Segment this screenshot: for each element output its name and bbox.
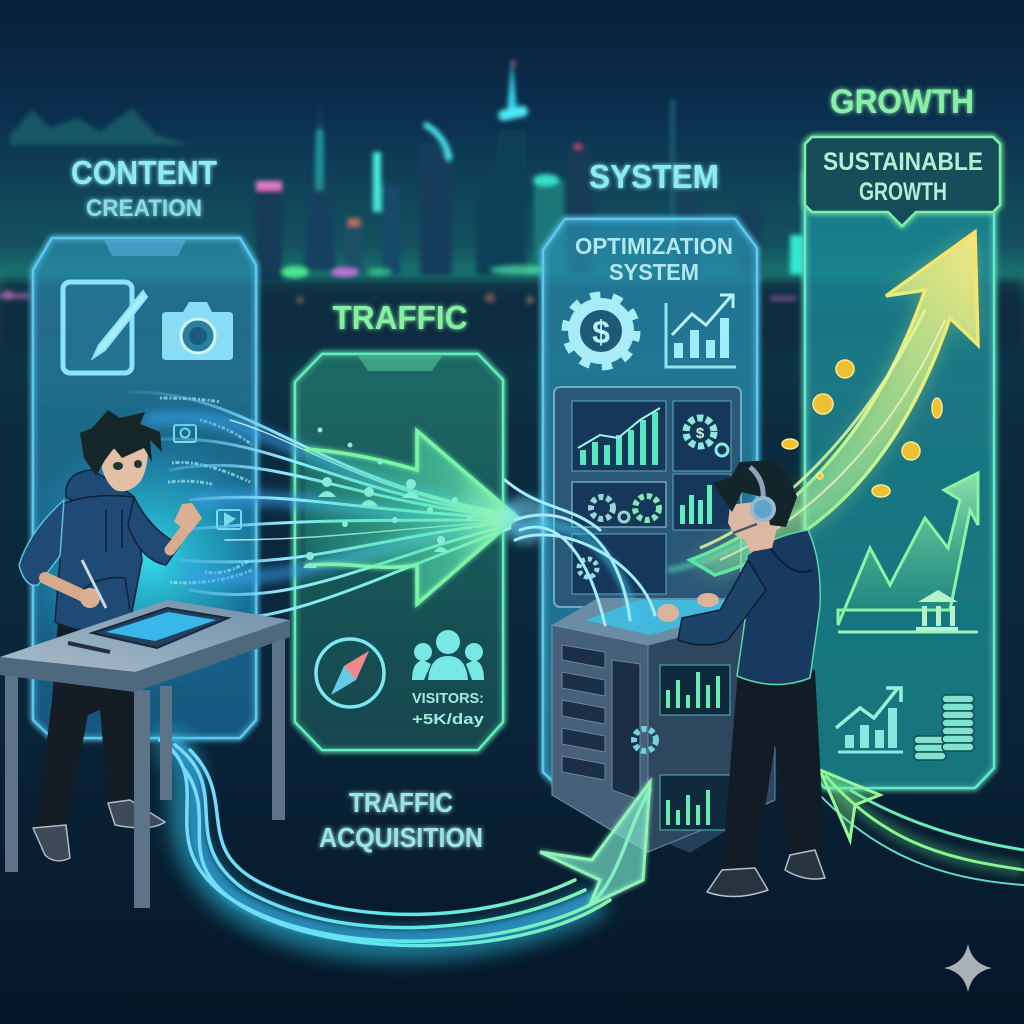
legs <box>722 670 825 870</box>
icon: coin stacks <box>914 695 974 760</box>
caption: traffic acquisition: TRAFFIC <box>349 787 453 818</box>
icon: small camera <box>174 425 196 442</box>
dashboard screen <box>554 387 741 607</box>
icon: tablet and pen <box>63 282 147 373</box>
eyes <box>113 460 142 470</box>
sleeve <box>678 560 766 645</box>
visitors label: +5K/day <box>412 711 485 728</box>
hair <box>80 410 162 476</box>
heading: system: SYSTEM <box>589 158 719 195</box>
panel: system <box>543 158 778 853</box>
pen on desk <box>68 643 110 652</box>
city horizon <box>0 265 1024 350</box>
flow: right curved green arrow <box>815 770 1024 885</box>
heading: content creation <box>71 154 217 222</box>
icon: green growth chart with bank <box>838 473 978 632</box>
visitors label <box>412 690 485 728</box>
desk legs <box>5 632 285 908</box>
icon: dollar gear <box>566 296 636 366</box>
skin: forearms and hands <box>45 503 202 608</box>
tablet on desk <box>92 608 228 648</box>
shoes <box>33 800 165 861</box>
desk front edge <box>0 620 290 692</box>
panel notch <box>104 240 186 256</box>
caption: traffic acquisition <box>319 787 483 853</box>
server rows <box>562 645 640 800</box>
icon: dollar gear: $ <box>592 314 610 350</box>
panel notch <box>358 356 442 371</box>
hair <box>713 460 797 527</box>
panel: traffic <box>295 299 503 750</box>
icon: camera <box>162 302 233 360</box>
character: operator <box>657 460 825 897</box>
gears tile <box>572 482 666 527</box>
visitors label: VISITORS: <box>412 690 484 707</box>
glow: behind creator <box>36 443 256 635</box>
flow: traffic to system streams <box>501 480 800 625</box>
dollar gear tile: $ <box>696 425 705 442</box>
panel: content creation <box>26 157 262 744</box>
heading: traffic: TRAFFIC <box>332 299 468 336</box>
heading: content creation: CREATION <box>86 195 202 222</box>
callout: sustainable growth <box>805 137 1000 226</box>
icon: small rising chart <box>836 688 903 752</box>
hoodie torso <box>737 530 820 685</box>
face <box>728 500 778 552</box>
icon: sparkle watermark <box>944 944 992 992</box>
right arm <box>128 497 180 565</box>
caption: traffic acquisition: ACQUISITION <box>319 822 483 853</box>
character: creator <box>19 410 202 861</box>
hoodie torso <box>55 496 142 631</box>
server rack <box>552 598 778 853</box>
dollar gear tile <box>673 401 731 471</box>
subheading: optimization system: OPTIMIZATION <box>575 233 733 259</box>
hood <box>66 470 134 522</box>
icon: rising chart <box>666 295 736 367</box>
hood fold <box>765 540 812 572</box>
particles: visitor icons <box>303 428 473 568</box>
flow: lower curved arrow <box>160 740 650 946</box>
stylus <box>82 560 106 608</box>
subheading: optimization system: SYSTEM <box>609 259 699 285</box>
flow: growth arrow <box>690 232 978 575</box>
legs <box>36 620 137 828</box>
heading: content creation: CONTENT <box>71 154 217 191</box>
desk top <box>0 600 290 672</box>
subheading: optimization system <box>575 233 733 285</box>
rack gear <box>634 729 656 751</box>
flow: system to growth stream <box>670 510 800 570</box>
flow: content to traffic streams <box>130 392 510 620</box>
icon: visitors group <box>412 630 484 680</box>
callout: sustainable growth: GROWTH <box>859 178 947 206</box>
headset <box>733 467 774 533</box>
city skyline <box>10 60 804 281</box>
panel: growth <box>805 83 1000 788</box>
shoes <box>707 850 825 897</box>
chart tile <box>572 401 666 471</box>
arrow: traffic green arrow <box>305 431 517 604</box>
heading: growth: GROWTH <box>830 83 974 121</box>
desk <box>0 600 290 908</box>
hoodie drawstrings and pocket <box>75 510 130 610</box>
rack displays <box>660 665 730 830</box>
left arm <box>19 500 64 585</box>
coins <box>782 360 942 497</box>
data text streams <box>160 398 252 583</box>
small gear tile <box>572 534 666 594</box>
callout: sustainable growth: SUSTAINABLE <box>823 148 983 176</box>
icon: small play button <box>217 510 241 529</box>
icon: compass <box>316 639 384 707</box>
face <box>100 448 148 491</box>
rack bars <box>666 672 720 825</box>
bars tile <box>673 474 731 530</box>
hands <box>657 593 719 622</box>
